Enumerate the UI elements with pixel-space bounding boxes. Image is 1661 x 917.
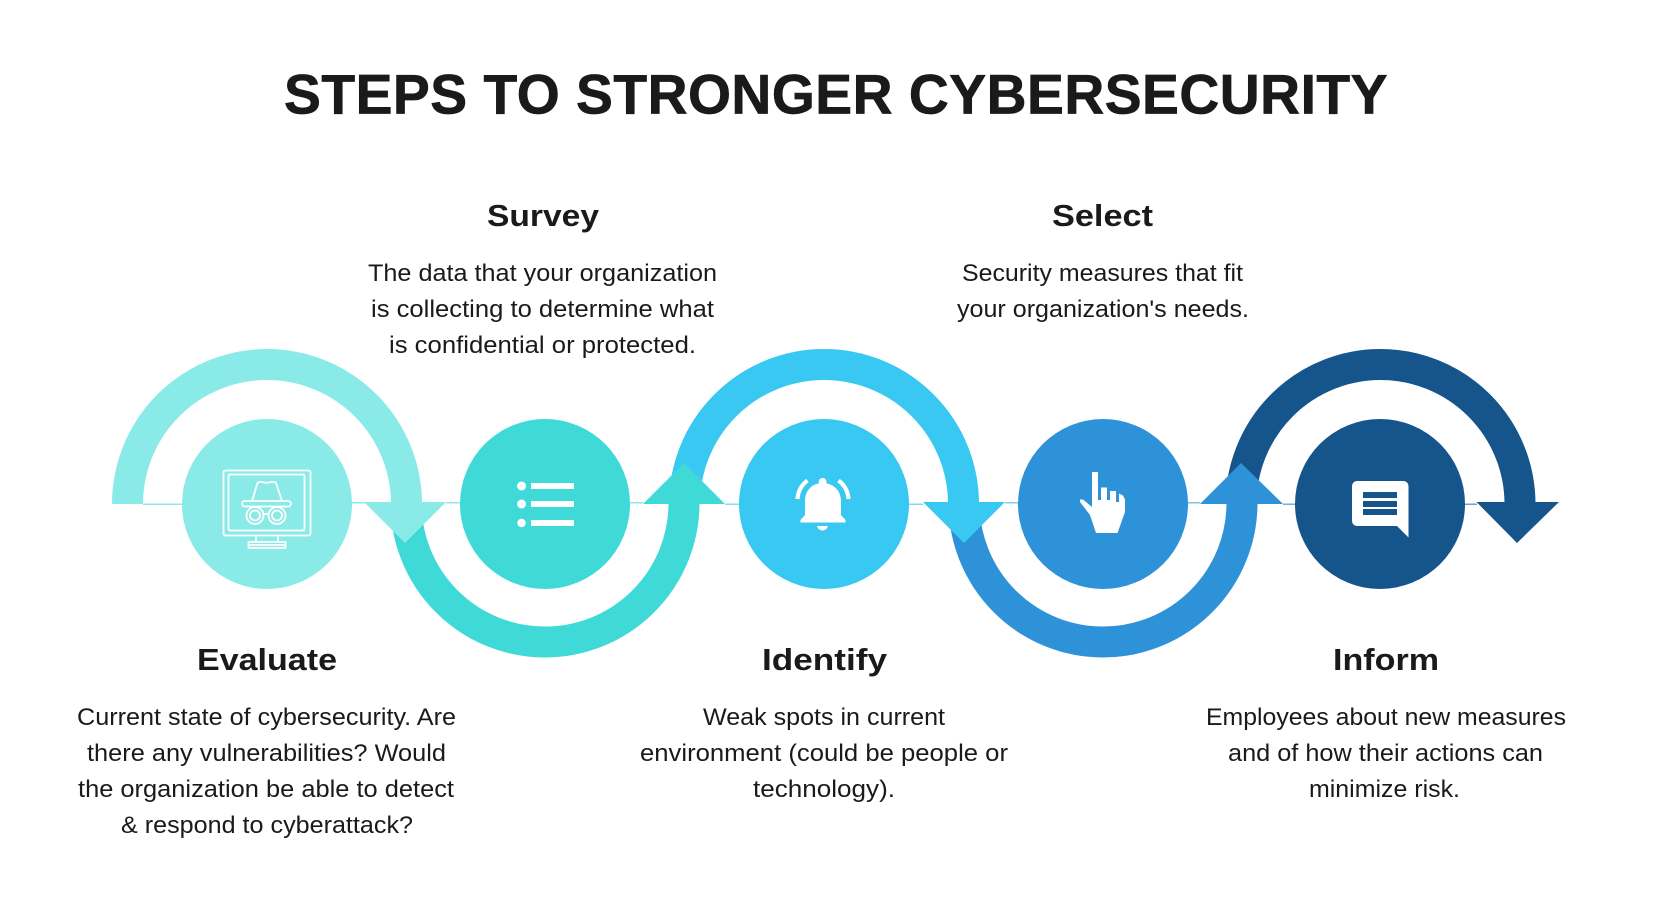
text block: inform: Employees about new measures: [1206, 704, 1566, 731]
text block: select: [957, 198, 1249, 323]
arrow: select arc: [964, 463, 1295, 642]
text block: evaluate: there any vulnerabilities? Would: [87, 740, 446, 767]
text block: survey: Survey: [487, 198, 600, 233]
arrow: survey arc: [406, 463, 740, 642]
circle: identify: [739, 419, 909, 589]
arrow: inform arc: [1241, 364, 1559, 543]
icon: pointing hand: [1080, 472, 1125, 533]
text block: survey: The data that your organization: [368, 260, 717, 287]
text block: evaluate: & respond to cyberattack?: [121, 812, 413, 839]
title: STEPS TO STRONGER CYBERSECURITY: [284, 62, 1388, 126]
text block: survey: is collecting to determine what: [371, 296, 714, 323]
text block: evaluate: Evaluate: [197, 642, 337, 677]
icon: chat bubble: [1352, 481, 1408, 538]
text block: inform: minimize risk.: [1309, 776, 1460, 803]
circle: select: [1018, 419, 1188, 589]
text block: evaluate: [77, 642, 456, 839]
circle: inform: [1295, 419, 1465, 589]
text block: select: Select: [1052, 198, 1153, 233]
icon: list: [517, 482, 574, 527]
icon: bell: [798, 478, 848, 530]
text block: identify: [640, 642, 1008, 803]
text block: inform: and of how their actions can: [1228, 740, 1543, 767]
icon: monitor with spy: [224, 470, 310, 548]
text block: select: your organization's needs.: [957, 296, 1249, 323]
text block: inform: [1206, 642, 1566, 803]
text block: inform: Inform: [1333, 642, 1439, 677]
text block: survey: [368, 198, 717, 359]
circle: evaluate: [182, 419, 352, 589]
arrow: identify arc: [684, 364, 1019, 543]
text block: identify: Identify: [762, 642, 888, 677]
text block: evaluate: the organization be able to detect: [78, 776, 454, 803]
circle: survey: [460, 419, 630, 589]
text block: evaluate: Current state of cybersecurity. Are: [77, 704, 456, 731]
text block: survey: is confidential or protected.: [389, 332, 696, 359]
text block: select: Security measures that fit: [962, 260, 1243, 287]
text block: identify: Weak spots in current: [703, 704, 945, 731]
arrow: evaluate arc: [128, 364, 462, 543]
text block: identify: environment (could be people or: [640, 740, 1008, 767]
text block: identify: technology).: [753, 776, 895, 803]
